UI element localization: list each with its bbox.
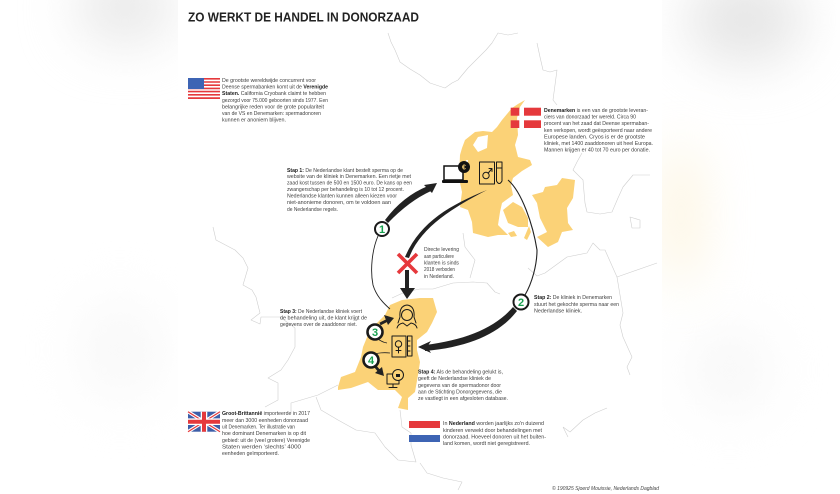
text: United States: belangrijke reden voor de grote populariteit xyxy=(222,104,324,110)
text: step 2 xyxy=(534,295,619,314)
text: step 4 xyxy=(418,370,508,402)
text: United Kingdom: Staten werden ‘slechts’ 4000 xyxy=(222,444,301,450)
text: step 3: gegevens over de zaaddonor niet. xyxy=(280,322,357,328)
text: direct delivery banned: 2018 verboden xyxy=(424,267,455,273)
icon: female client xyxy=(397,305,417,328)
step marker 2: 2 xyxy=(518,297,524,309)
text: United Kingdom xyxy=(222,411,310,457)
text: step 1: niet-anonieme donoren, om te voldoen aan xyxy=(287,200,391,206)
icon: male donor book and test tube xyxy=(480,162,502,184)
text: step 4: ze vastlegt in een afgesloten database. xyxy=(418,396,508,402)
text: Denmark: ciers van donorzaad ter wereld. Circa 90 xyxy=(544,114,636,120)
text: United Kingdom: meer dan 3000 eenheden donorzaad xyxy=(222,418,308,424)
text: direct delivery banned: Directe levering xyxy=(424,247,459,253)
map: Denmark xyxy=(459,100,575,247)
map: Netherlands xyxy=(338,298,437,410)
text: step 3 xyxy=(280,309,367,328)
text: Netherlands: In Nederland worden jaarlijks zo'n duizend xyxy=(443,421,544,427)
text: Denmark: Denemarken is een van de grootste leveran- xyxy=(544,108,648,114)
icon: female book and ruler xyxy=(392,336,412,357)
text: step 4: aan de Stichting Donorgegevens, die xyxy=(418,390,502,396)
text: United States: Staten. California Cryobank claimt te hebben xyxy=(222,91,326,97)
text: Denmark: kliniek, met 1400 zaaddonoren uit heel Europa. xyxy=(544,141,653,147)
step marker 4 xyxy=(364,352,378,368)
text: United Kingdom: Groot-Brittannië importeerde in 2017 xyxy=(222,411,310,417)
icon: red cross xyxy=(398,254,417,273)
arrow 1: Netherlands to Denmark xyxy=(372,183,437,309)
text: Denmark: Europese landen. Cryos is er de grootste xyxy=(544,134,645,140)
step marker 3: 3 xyxy=(372,327,378,339)
text: United States: De grootste wereldwijde concurrent voor xyxy=(222,78,316,84)
text: Denmark xyxy=(544,108,653,153)
arrow: blocked direct delivery xyxy=(400,190,487,299)
icon: laptop with euro coin: € xyxy=(462,164,466,172)
icon: laptop with euro coin xyxy=(442,161,470,183)
credit: © 190925 Sjoerd Mouissie, Nederlands Dagblad xyxy=(552,485,660,492)
flag: Netherlands xyxy=(409,421,440,442)
icon: monitor with database lock xyxy=(387,370,404,388)
text: step 2: stuurt het gekochte sperma naar een xyxy=(534,302,619,308)
text: Netherlands: land komen, wordt niet geregistreerd. xyxy=(443,441,530,447)
flag: United States xyxy=(188,78,220,99)
text: step 1: Nederlandse klanten kunnen alleen kiezen voor xyxy=(287,194,397,200)
text: step 4: gegevens van de spermadonor door xyxy=(418,383,501,389)
text: step 1: de Nederlandse regels. xyxy=(287,207,338,213)
arrow 3: clinic to client xyxy=(377,315,394,343)
text: Denmark: ken verkopen, wordt geëxporteerd naar andere xyxy=(544,128,652,134)
text: United States: gezorgd voor 75.000 geboorten sinds 1977. Een xyxy=(222,98,328,104)
text: step 3: de behandeling uit, de klant krijgt de xyxy=(280,316,367,322)
arrow 2: Denmark to Netherlands xyxy=(418,180,537,353)
step marker 2 xyxy=(514,294,528,310)
step marker 3 xyxy=(368,324,382,340)
text: United Kingdom: hoe dominant Denemarken is op dit xyxy=(222,431,306,437)
text: United States: Deense spermabanken komt uit de Verenigde xyxy=(222,84,328,90)
text: direct delivery banned: in Nederland. xyxy=(424,274,454,280)
text: step 4: geeft de Nederlandse kliniek de xyxy=(418,376,491,382)
text: Netherlands: donorzaad. Hoeveel donoren uit het buiten- xyxy=(443,434,546,440)
text: direct delivery banned xyxy=(424,247,459,280)
arrow 4: clinic to database xyxy=(375,353,390,376)
text: United Kingdom: gebied: uit de (veel grotere) Verenigde xyxy=(222,438,310,444)
map outlines of surrounding countries xyxy=(213,33,657,490)
text: step 3: Stap 3: De Nederlandse kliniek voert xyxy=(280,309,362,315)
text: step 1: zaad kost tussen de 500 en 1500 euro. De kans op een xyxy=(287,180,412,186)
text: step 4: Stap 4: Als de behandeling gelukt is, xyxy=(418,370,503,376)
text: Denmark: procent van het zaad dat Deense spermaban- xyxy=(544,121,649,127)
text: step 1: zwangerschap per behandeling is 10 tot 12 procent. xyxy=(287,187,404,193)
step marker 4: 4 xyxy=(368,355,375,367)
text: United Kingdom: uit Denemarken. Ter illustratie van xyxy=(222,424,295,430)
title: ZO WERKT DE HANDEL IN DONORZAAD xyxy=(188,11,419,25)
text: United Kingdom: eenheden geïmporteerd. xyxy=(222,451,279,457)
text: step 1: website van de kliniek in Denemarken. Een rietje met xyxy=(286,174,411,180)
text: step 1 xyxy=(286,168,412,213)
text: Netherlands: kinderen verwekt door behandelingen met xyxy=(443,428,542,434)
text: United States: kunnen er anoniem blijven. xyxy=(222,117,286,123)
flag: United Kingdom xyxy=(188,412,220,432)
flag: Denmark xyxy=(511,108,541,128)
text: step 2: Nederlandse kliniek. xyxy=(534,308,582,314)
text: step 1: Stap 1: De Nederlandse klant bestelt sperma op de xyxy=(287,168,403,174)
text: direct delivery banned: aan particuliere xyxy=(424,254,454,260)
step marker 1 xyxy=(375,222,389,236)
text: Denmark: Mannen krijgen er 40 tot 70 euro per donatie. xyxy=(544,147,650,153)
text: United States xyxy=(222,78,328,123)
step marker 1: 1 xyxy=(379,224,385,236)
text: step 2: Stap 2: De kliniek in Denemarken xyxy=(534,295,612,301)
text: direct delivery banned: klanten is sinds xyxy=(424,260,459,266)
text: Netherlands xyxy=(443,421,546,447)
text: United States: van de VS en Denemarken: spermadonoren xyxy=(222,111,321,117)
